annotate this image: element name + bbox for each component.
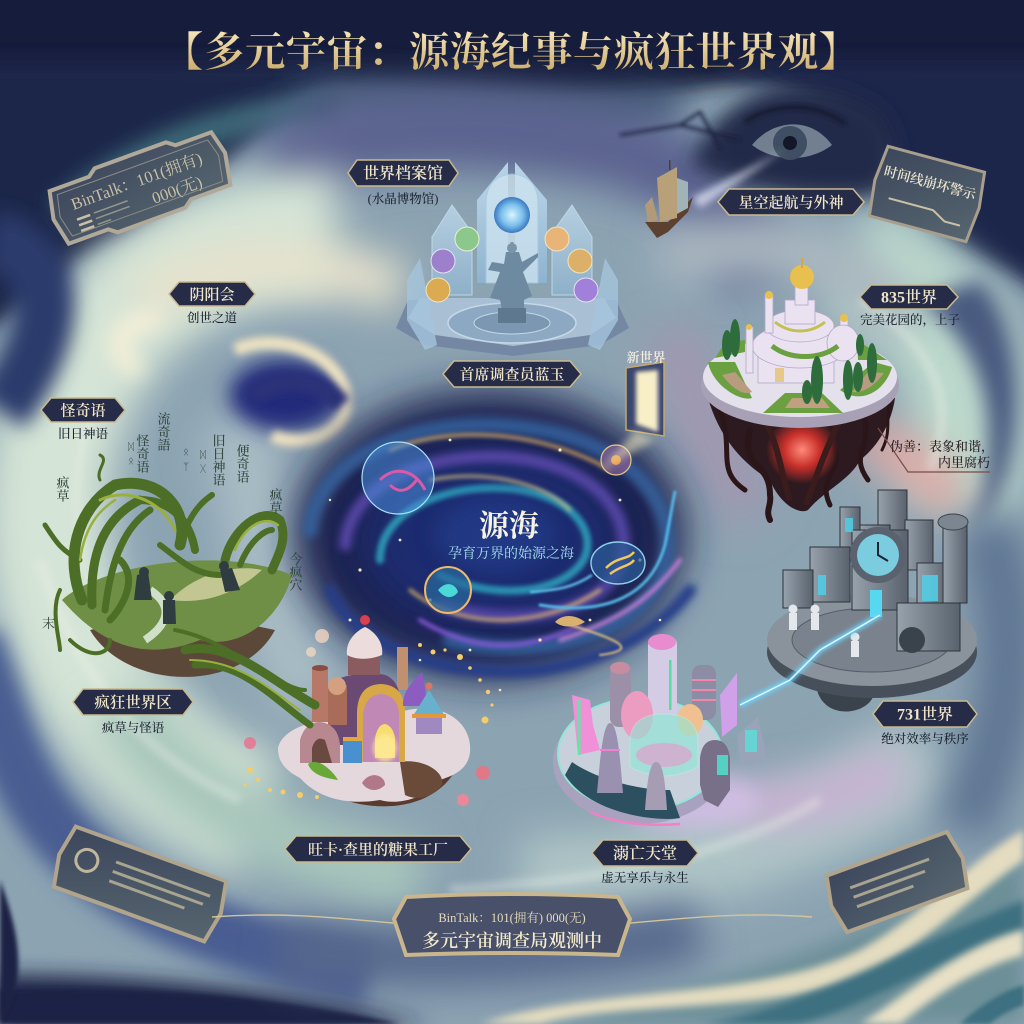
floating runes and vertical words: 今疯穴 xyxy=(288,551,302,591)
label: world archive xyxy=(348,160,458,206)
floating runes and vertical words: 末 xyxy=(42,616,55,631)
door: new world: 新世界 xyxy=(626,350,666,365)
floating runes and vertical words: 疯草 xyxy=(268,488,282,514)
label: yin-yang society: 阴阳会 xyxy=(189,286,235,304)
label: yin-yang society: 创世之道 xyxy=(187,310,237,325)
panel: BinTalk code note: BinTalk：101(拥有) xyxy=(68,149,205,214)
floating runes and vertical words: 疯草 xyxy=(54,476,70,502)
floating runes and vertical words: ᛟ xyxy=(128,456,134,467)
floating runes and vertical words: 流奇語 xyxy=(156,411,170,451)
central title: source sea: 孕育万界的始源之海 xyxy=(448,545,574,562)
bottom banner xyxy=(212,894,812,955)
label: mad world zone: 疯狂世界区 xyxy=(94,694,172,712)
bottom banner: 多元宇宙调查局观测中 xyxy=(422,931,602,951)
bubble worlds in the vortex xyxy=(362,442,645,626)
label: world archive: (水晶博物馆) xyxy=(368,191,438,206)
candy factory island xyxy=(243,615,494,806)
label: strange tongue: 旧日神语 xyxy=(58,426,108,441)
label: drowned paradise: 虚无享乐与永生 xyxy=(601,870,689,885)
label: mad world zone xyxy=(73,689,193,735)
floating runes and vertical words: 怪奇语 xyxy=(134,433,150,473)
neon city: drowned paradise xyxy=(553,634,767,830)
door: new world xyxy=(600,350,666,470)
label: candy factory xyxy=(285,836,471,862)
central title: source sea xyxy=(448,510,574,562)
floating runes and vertical words xyxy=(42,411,302,631)
floating runes and vertical words: ᛉ xyxy=(183,462,189,473)
ship: starry voyage xyxy=(645,150,785,238)
label: strange tongue xyxy=(41,398,125,441)
label: world 835: 完美花园的，上子 xyxy=(860,312,960,327)
label: starry voyage: 星空起航与外神 xyxy=(738,194,844,212)
callout: hypocrisy: 伪善：表象和谐， xyxy=(890,439,994,455)
callout: hypocrisy: 内里腐朽 xyxy=(938,455,990,470)
floating perfect garden: world 835 xyxy=(701,258,899,520)
bottom banner: BinTalk：101(拥有) 000(无) xyxy=(438,910,586,925)
panel: timeline collapse warning xyxy=(866,145,988,243)
floating runes and vertical words: 便奇语 xyxy=(234,443,250,483)
floating runes and vertical words: ᛞ xyxy=(128,442,134,453)
floating runes and vertical words: ᛟ xyxy=(183,447,189,458)
swirl: upper-left nebula xyxy=(119,320,346,441)
label: yin-yang society xyxy=(169,282,255,325)
label: world 731: 绝对效率与秩序 xyxy=(881,731,969,746)
title: 【多元宇宙：源海纪事与疯狂世界观】 xyxy=(162,29,860,75)
label: world 835: 835世界 xyxy=(881,288,937,306)
panel: bottom-left note xyxy=(48,825,232,943)
panel: timeline collapse warning: 时间线崩坏警示 xyxy=(882,162,979,203)
label: strange tongue: 怪奇语 xyxy=(60,402,106,420)
label: starry voyage xyxy=(718,189,864,215)
label: mad world zone: 疯草与怪语 xyxy=(102,720,165,735)
outer god eye xyxy=(620,85,897,199)
central vortex: source sea xyxy=(295,390,690,691)
label: world 731: 731世界 xyxy=(897,706,953,724)
label: world 731 xyxy=(873,701,977,746)
central title: source sea: 源海 xyxy=(479,510,539,543)
label: drowned paradise: 溺亡天堂 xyxy=(613,844,677,862)
label: world archive: 世界档案馆 xyxy=(363,164,443,182)
label: world 835 xyxy=(860,285,960,327)
callout: hypocrisy xyxy=(878,428,994,472)
crystal archive museum xyxy=(396,162,629,356)
label: drowned paradise xyxy=(592,840,698,885)
floating runes and vertical words: ᚷ xyxy=(200,464,206,475)
panel: bottom-right note xyxy=(821,830,973,934)
panel: BinTalk code note xyxy=(42,125,238,251)
floating runes and vertical words: 旧日神语 xyxy=(210,434,226,486)
label: chief investigator: 首席调查员蓝玉 xyxy=(459,366,565,384)
label: chief investigator xyxy=(443,361,581,387)
floating runes and vertical words: ᛞ xyxy=(200,450,206,461)
mad world island with vines xyxy=(45,455,315,725)
label: candy factory: 旺卡·查里的糖果工厂 xyxy=(308,840,448,858)
machine world 731 xyxy=(740,490,977,712)
panel: BinTalk code note: 000(无) xyxy=(149,172,205,208)
